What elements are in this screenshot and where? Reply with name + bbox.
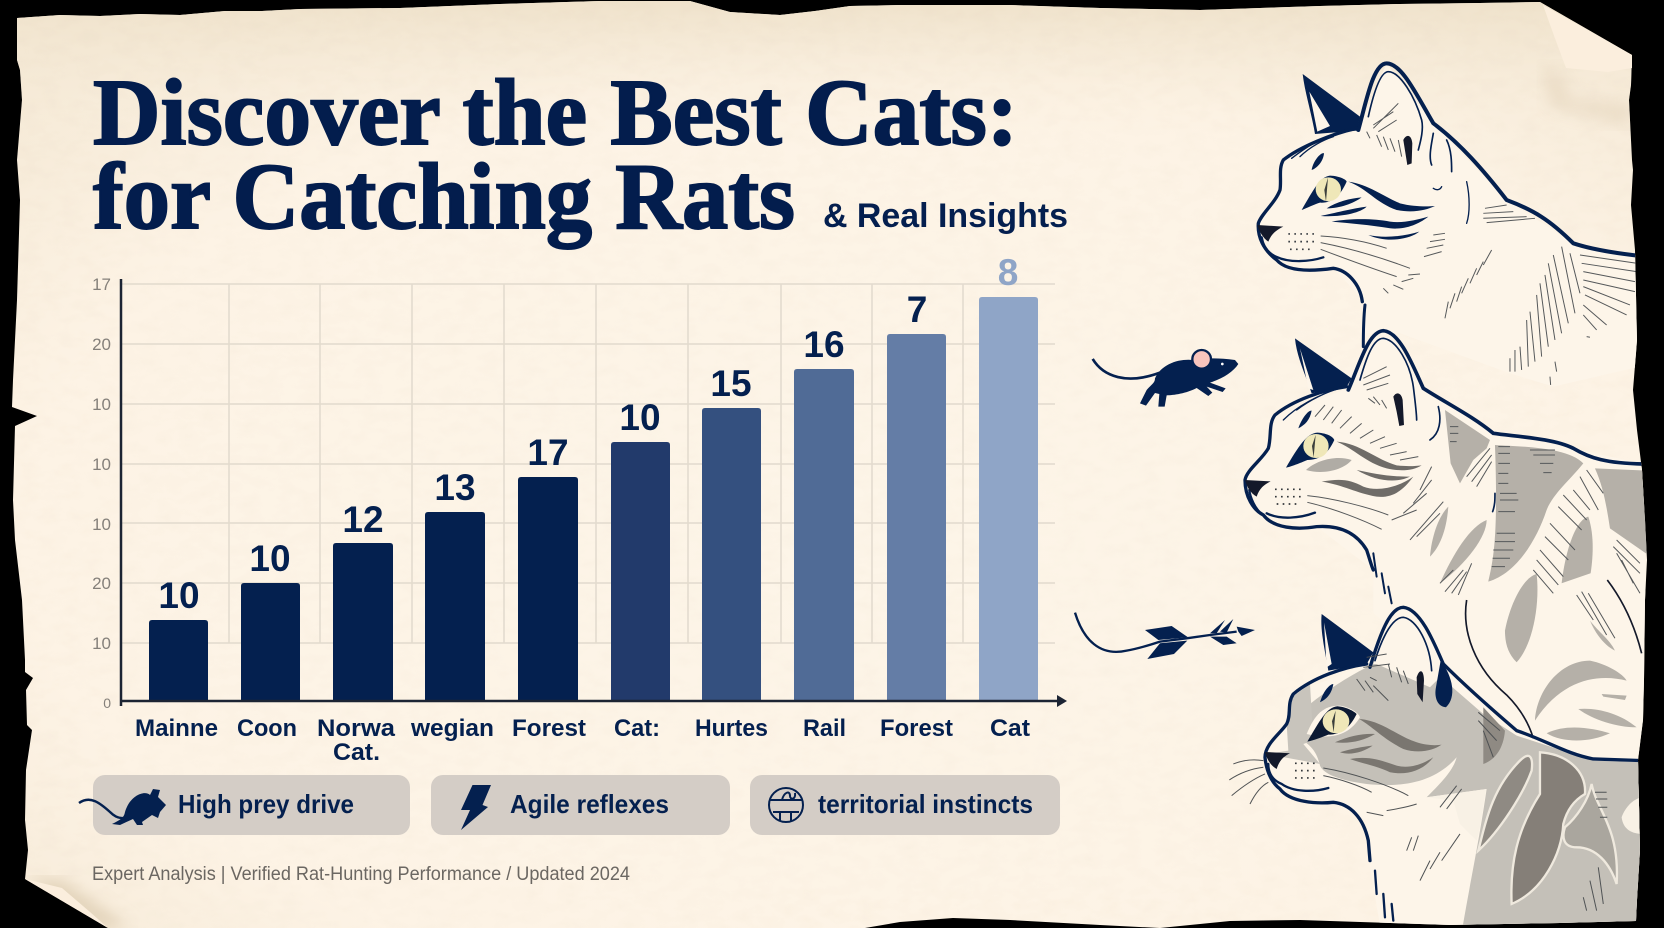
icon: territory globe — [769, 788, 803, 822]
y axis labels: 10 — [92, 395, 111, 414]
page curl: top right — [1543, 5, 1632, 72]
cat 1 (top) — [1257, 63, 1640, 387]
y axis labels: 0 — [103, 695, 111, 711]
value labels: 16 — [803, 324, 845, 365]
white fur notch — [1429, 789, 1640, 834]
title — [93, 61, 1018, 249]
category labels: Cat. — [333, 739, 380, 766]
cat 3 silhouette — [1380, 761, 1640, 925]
subtitle: & Real Insights — [823, 197, 1068, 235]
value labels: 10 — [619, 397, 661, 438]
category labels: Forest — [880, 715, 953, 742]
pill: agile reflexes — [431, 775, 730, 835]
icon: arrow — [1075, 613, 1255, 659]
category labels: wegian — [410, 715, 494, 742]
pill: high prey drive: High prey drive — [178, 789, 354, 819]
y axis labels: 10 — [92, 515, 111, 534]
value labels: 17 — [527, 432, 569, 473]
footer note: Expert Analysis | Verified Rat-Hunting Performance / Updated 2024 — [92, 864, 630, 885]
value labels: 8 — [998, 252, 1018, 293]
dark ear — [1303, 74, 1360, 134]
pill: territorial instincts — [750, 775, 1060, 835]
category labels — [135, 715, 1030, 766]
cat 2 (middle) — [1245, 331, 1650, 820]
category labels: Cat — [990, 715, 1030, 742]
icon: lightning bolt — [461, 785, 491, 830]
value labels — [158, 252, 1018, 616]
category labels: Cat: — [614, 715, 660, 742]
y axis labels: 17 — [92, 275, 111, 294]
title: Discover the Best Cats: — [93, 61, 1018, 165]
icon: rat — [79, 789, 166, 825]
page curl: bottom left — [25, 879, 108, 928]
category labels: Rail — [803, 715, 846, 742]
title: for Catching Rats — [93, 145, 795, 249]
pill: high prey drive — [79, 775, 410, 835]
bars — [149, 297, 1038, 701]
y axis labels: 20 — [92, 574, 111, 593]
y axis labels: 20 — [92, 335, 111, 354]
axes — [121, 279, 1064, 706]
bar chart — [92, 252, 1067, 766]
y axis labels: 10 — [92, 634, 111, 653]
dark ear — [1295, 338, 1352, 393]
value labels: 10 — [249, 538, 291, 579]
grey fur — [1306, 656, 1640, 925]
dark ear — [1321, 614, 1373, 671]
value labels: 15 — [710, 363, 752, 404]
axis arrow — [1057, 695, 1067, 707]
value labels: 10 — [158, 575, 200, 616]
y axis labels: 10 — [92, 455, 111, 474]
pill: territorial instincts: territorial instincts — [818, 789, 1033, 819]
category labels: Hurtes — [695, 715, 768, 742]
pill: agile reflexes: Agile reflexes — [510, 789, 669, 819]
cat 3 (bottom) — [1229, 607, 1643, 928]
value labels: 12 — [342, 499, 384, 540]
category labels: Forest — [512, 715, 586, 742]
category labels: Coon — [237, 715, 297, 742]
category labels: Norwa — [317, 715, 396, 742]
value labels: 13 — [434, 467, 476, 508]
y axis labels — [92, 275, 111, 711]
icon: running mouse — [1093, 350, 1238, 407]
value labels: 7 — [907, 289, 927, 330]
illustration: cat portraits — [1229, 63, 1650, 928]
dark patches — [1478, 752, 1617, 904]
grey coat patches — [1430, 410, 1648, 741]
category labels: Mainne — [135, 715, 218, 742]
